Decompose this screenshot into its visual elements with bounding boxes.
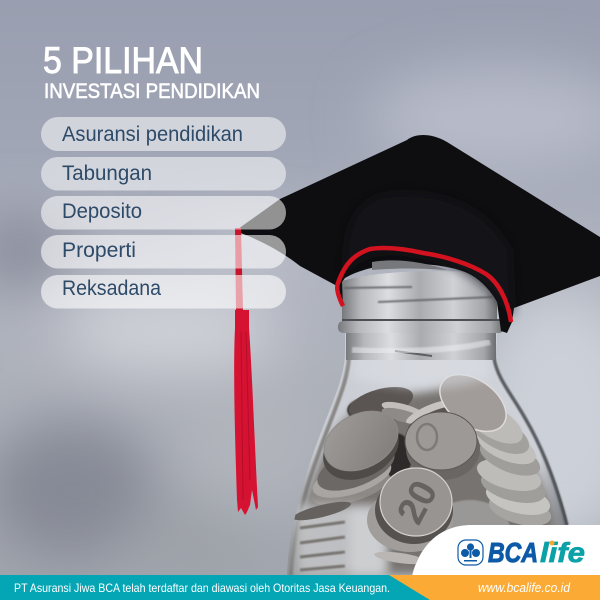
option: asuransi pendidikan: Asuransi pendidikan	[62, 122, 243, 146]
option: deposito	[41, 196, 286, 230]
coin 20: 20	[389, 474, 446, 531]
neck ring	[338, 321, 504, 333]
coin pile base	[297, 385, 555, 575]
glass bottle with coins	[287, 271, 568, 575]
option: tabungan	[41, 157, 286, 190]
neck upper	[342, 271, 497, 325]
bottle body	[287, 333, 568, 575]
middle coin	[405, 412, 480, 480]
teal band	[0, 575, 430, 600]
wordmark: BCA	[488, 537, 538, 568]
inner lining	[372, 260, 447, 270]
red ribbon	[337, 248, 511, 322]
white logo panel	[412, 525, 600, 576]
website: www.bcalife.co.id	[478, 581, 571, 595]
red tassel	[234, 228, 258, 515]
orange band	[380, 575, 600, 600]
coin 20	[367, 468, 453, 552]
glass highlight	[359, 360, 483, 394]
disclaimer: PT Asuransi Jiwa BCA telah terdaftar dan diawasi oleh Otoritas Jasa Keuangan.	[14, 581, 390, 595]
lower-left blurred stack	[291, 498, 388, 575]
option: properti: Properti	[62, 238, 136, 262]
heading: 5 pilihan: 5 PILIHAN	[43, 40, 203, 81]
icon: BCA emblem	[458, 540, 483, 565]
option: reksadana: Reksadana	[62, 276, 161, 300]
graduation cap	[238, 135, 600, 333]
right coin stack	[439, 375, 551, 525]
option: asuransi pendidikan	[41, 117, 286, 151]
option: properti	[41, 235, 286, 268]
list of investment options	[41, 117, 286, 308]
neck lower	[346, 333, 496, 360]
subheading: INVESTASI PENDIDIKAN	[44, 80, 260, 103]
back coins	[349, 387, 448, 428]
BCA life logo	[458, 537, 585, 568]
footer bar	[0, 575, 600, 600]
title	[43, 40, 260, 103]
option: reksadana	[41, 275, 286, 308]
dark gaps	[346, 398, 510, 528]
coins	[291, 345, 555, 575]
BCA life logo: life	[540, 537, 585, 568]
option: tabungan: Tabungan	[62, 161, 152, 185]
cap skull shading	[345, 193, 513, 318]
bottle neck	[338, 271, 504, 360]
left coin stack	[312, 410, 399, 504]
option: deposito: Deposito	[62, 199, 142, 223]
cap board and skull	[238, 135, 600, 333]
